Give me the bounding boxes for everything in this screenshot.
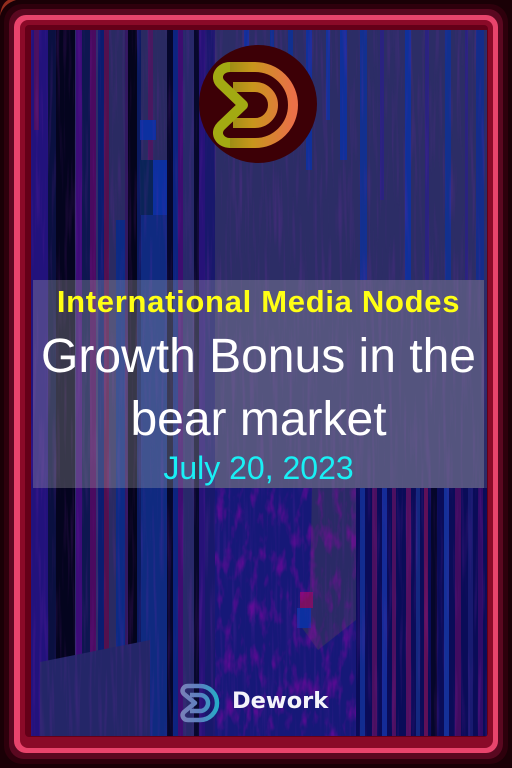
background: lower central mottled area bbox=[40, 488, 356, 736]
date: July 20, 2023 bbox=[163, 450, 354, 486]
main title bbox=[41, 330, 476, 446]
main title: Growth Bonus in the bbox=[41, 330, 476, 383]
footer brand bbox=[183, 686, 329, 720]
background: mottled texture bbox=[215, 488, 356, 736]
logo disc bbox=[199, 45, 317, 163]
logo badge bbox=[199, 45, 317, 163]
main title: bear market bbox=[130, 393, 387, 446]
background: left stripe field bbox=[31, 30, 215, 736]
eyebrow heading: International Media Nodes bbox=[57, 284, 460, 319]
background: lower right stripes bbox=[356, 488, 487, 736]
background: upper right panel stripes bbox=[215, 30, 487, 280]
title panel bbox=[33, 280, 484, 488]
icon: Dework mark bbox=[183, 686, 217, 720]
wordmark: Dework bbox=[232, 688, 329, 714]
logo mark bbox=[218, 67, 293, 143]
